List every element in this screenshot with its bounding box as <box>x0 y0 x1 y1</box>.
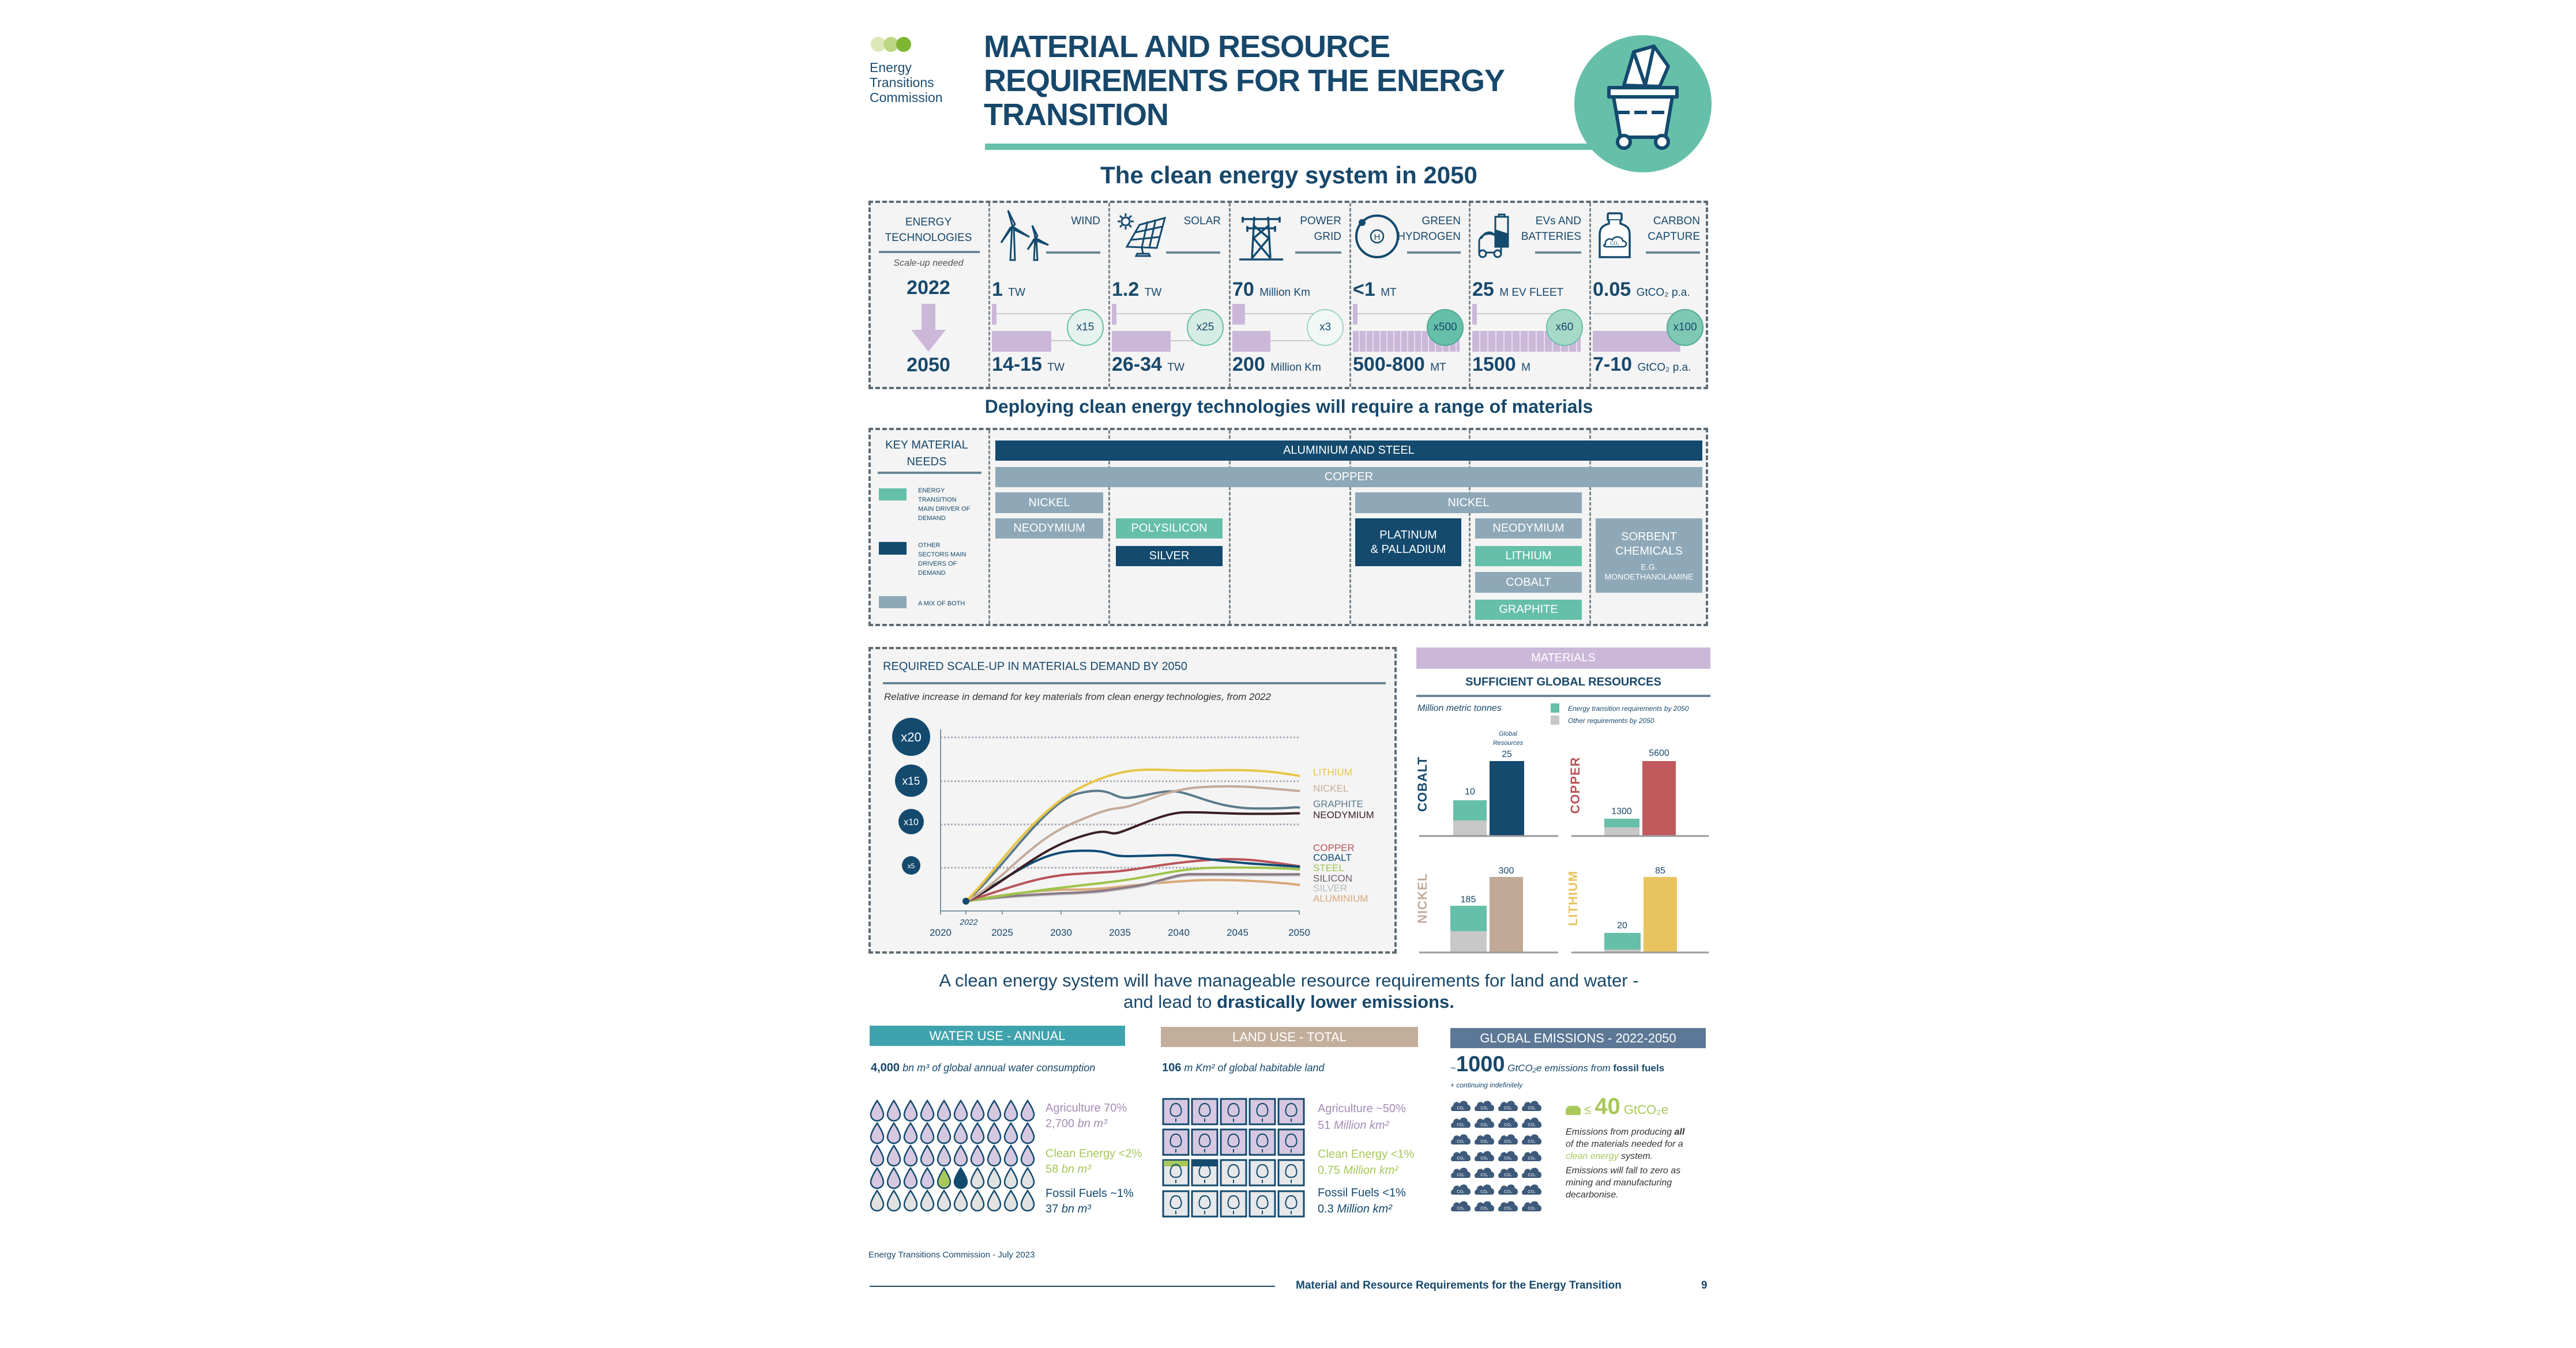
panel: global emissions <box>1450 1028 1706 1211</box>
legend: key material needs: DRIVERS OF <box>918 560 957 567</box>
material bars: COPPER <box>1325 470 1373 483</box>
panel: water use <box>870 1026 1142 1215</box>
panel: water use: 37 bn m³ <box>1046 1203 1091 1215</box>
line chart: COBALT <box>1313 852 1352 863</box>
icon: mine cart <box>1574 35 1712 172</box>
column: green hydrogen: HYDROGEN <box>1397 231 1461 243</box>
column: carbon capture: CO₂ <box>1610 240 1619 246</box>
column: carbon capture: CARBON <box>1653 215 1700 227</box>
bar chart: cobalt: 10 <box>1465 787 1475 797</box>
panel: global emissions: Emissions from producing all <box>1566 1127 1684 1137</box>
panel: energy technologies <box>868 201 1708 389</box>
column: EVs and batteries: 1500 M <box>1472 353 1530 375</box>
material bars: NICKEL <box>1447 496 1490 509</box>
bar chart: copper: 5600 <box>1649 748 1669 758</box>
panel: global emissions: ≤ 40 GtCO₂e <box>1584 1094 1668 1119</box>
column: wind: WIND <box>1071 215 1100 227</box>
line chart: 2030 <box>1050 927 1072 938</box>
title <box>984 29 1505 132</box>
panel: water use: 58 bn m³ <box>1046 1163 1091 1176</box>
material bars: & PALLADIUM <box>1371 543 1446 556</box>
panel: water use: Clean Energy <2% <box>1046 1147 1142 1160</box>
column: power grid: 70 Million Km <box>1232 278 1310 300</box>
legend: key material needs: MAIN DRIVER OF <box>918 506 970 513</box>
column: solar: SOLAR <box>1184 215 1221 227</box>
panel: sufficient global resources: Resources <box>1493 740 1523 747</box>
legend: key material needs: TRANSITION <box>918 496 957 503</box>
line chart: 2050 <box>1288 927 1310 938</box>
line chart: NICKEL <box>1313 783 1348 794</box>
column: energy technologies header: 2022 <box>907 277 950 299</box>
legend: key material needs <box>878 439 981 608</box>
line chart: STEEL <box>1313 863 1344 873</box>
line chart: LITHIUM <box>1313 767 1352 778</box>
material bars: SORBENT <box>1621 530 1677 543</box>
material bars: CHEMICALS <box>1615 544 1683 557</box>
column: power grid: 200 Million Km <box>1232 353 1321 375</box>
column: carbon capture: CAPTURE <box>1648 231 1700 243</box>
column: energy technologies header: ENERGY <box>905 216 952 228</box>
material bars: E.G. <box>1641 562 1657 571</box>
material bars: GRAPHITE <box>1499 603 1558 616</box>
panel: water use: Fossil Fuels ~1% <box>1046 1187 1134 1200</box>
column: wind: 14-15 TW <box>992 353 1065 375</box>
bar chart: cobalt: 25 <box>1502 750 1512 759</box>
text: 9 <box>1701 1279 1708 1291</box>
material bars: NEODYMIUM <box>1492 522 1565 534</box>
panel: land use: 0.75 Million km² <box>1318 1164 1398 1177</box>
legend: key material needs: A MIX OF BOTH <box>918 600 965 607</box>
column: wind: x15 <box>1077 321 1094 333</box>
panel: global emissions: ~1000 GtCO₂e emissions from fossil fuels <box>1450 1052 1664 1076</box>
material bars: NEODYMIUM <box>1013 522 1085 534</box>
panel: water use: 2,700 bn m³ <box>1046 1117 1107 1130</box>
column: green hydrogen: x500 <box>1433 321 1457 333</box>
panel: materials scale-up chart <box>868 647 1397 954</box>
column: wind <box>992 210 1104 375</box>
heading: manageable resource requirements: A clean energy system will have manageable resource requirements for land and water - <box>939 970 1639 991</box>
panel: global emissions: decarbonise. <box>1566 1190 1619 1200</box>
column: carbon capture: 0.05 GtCO₂ p.a. <box>1593 278 1690 300</box>
column: green hydrogen: 500-800 MT <box>1353 353 1446 375</box>
column: EVs and batteries <box>1472 213 1583 375</box>
bar chart: nickel <box>1416 866 1558 954</box>
logo: Transitions <box>870 75 934 90</box>
legend: key material needs: NEEDS <box>907 455 946 468</box>
heading: manageable resource requirements: and lead to drastically lower emissions. <box>1123 992 1454 1012</box>
line chart: 2035 <box>1109 927 1131 938</box>
legend: key material needs: DEMAND <box>918 570 946 577</box>
line chart: SILVER <box>1313 883 1347 894</box>
column: EVs and batteries: BATTERIES <box>1521 231 1581 243</box>
column: green hydrogen <box>1353 214 1464 375</box>
column: green hydrogen: H <box>1374 232 1380 242</box>
panel: land use: Agriculture ~50% <box>1318 1102 1406 1115</box>
column: carbon capture <box>1593 212 1703 375</box>
panel: key material needs <box>868 428 1708 626</box>
material bars: PLATINUM <box>1379 528 1437 541</box>
column: power grid: x3 <box>1319 321 1331 333</box>
column: carbon capture: x100 <box>1673 321 1697 333</box>
line chart: x10 <box>904 818 919 827</box>
heading: clean energy system: The clean energy system in 2050 <box>1100 161 1477 189</box>
column: power grid <box>1232 215 1344 375</box>
panel: sufficient global resources: Other requirements by 2050 <box>1568 717 1654 725</box>
title: REQUIREMENTS FOR THE ENERGY <box>984 63 1505 98</box>
logo: Commission <box>870 90 943 105</box>
legend: key material needs: ENERGY <box>918 487 945 494</box>
panel: sufficient global resources: MATERIALS <box>1531 652 1596 664</box>
line chart: SILICON <box>1313 873 1352 884</box>
panel: global emissions: GLOBAL EMISSIONS - 2022-2050 <box>1480 1031 1676 1045</box>
line chart: x20 <box>901 730 922 744</box>
bar chart: nickel: 185 <box>1461 895 1476 905</box>
panel: global emissions: + continuing indefinitely <box>1450 1081 1522 1089</box>
material bars: POLYSILICON <box>1131 522 1207 534</box>
bar chart: copper: 1300 <box>1611 807 1632 816</box>
panel: sufficient global resources <box>1416 647 1710 747</box>
bar chart: cobalt <box>1416 750 1558 837</box>
panel: water use: 4,000 bn m³ of global annual water consumption <box>871 1061 1095 1074</box>
heading: deploying: Deploying clean energy technologies will require a range of materials <box>985 396 1593 417</box>
panel: land use: LAND USE - TOTAL <box>1232 1030 1347 1044</box>
legend: key material needs: KEY MATERIAL <box>885 439 968 451</box>
material bars: LITHIUM <box>1505 549 1551 562</box>
bar chart: nickel: 300 <box>1499 866 1514 876</box>
legend: key material needs: OTHER <box>918 542 940 549</box>
column: solar: 26-34 TW <box>1112 353 1184 375</box>
panel: land use: Clean Energy <1% <box>1318 1148 1414 1161</box>
line chart: 2040 <box>1168 927 1190 938</box>
panel: land use: Fossil Fuels <1% <box>1318 1187 1406 1199</box>
material bars: ALUMINIUM AND STEEL <box>1283 444 1415 457</box>
material bars: MONOETHANOLAMINE <box>1604 572 1693 581</box>
panel: sufficient global resources: SUFFICIENT GLOBAL RESOURCES <box>1465 676 1661 688</box>
line chart: x5 <box>908 862 915 870</box>
text: Relative increase in demand for key materials from clean energy technologies, from 2022 <box>884 691 1271 702</box>
line chart: COPPER <box>1313 842 1355 853</box>
material bars: SILVER <box>1149 549 1189 562</box>
legend: key material needs: DEMAND <box>918 515 946 522</box>
footer: Energy Transitions Commission - July 2023 <box>868 1250 1035 1260</box>
title: MATERIAL AND RESOURCE <box>984 29 1390 64</box>
column: energy technologies header: 2050 <box>907 354 950 376</box>
column: carbon capture: 7-10 GtCO₂ p.a. <box>1593 353 1691 375</box>
column: EVs and batteries: 25 M EV FLEET <box>1472 278 1563 300</box>
bar chart: copper <box>1569 748 1709 837</box>
panel: land use: 0.3 Million km² <box>1318 1203 1392 1215</box>
panel: water use: WATER USE - ANNUAL <box>930 1029 1065 1043</box>
panel: global emissions: of the materials needed for a <box>1566 1139 1683 1149</box>
line chart: GRAPHITE <box>1313 799 1363 809</box>
title: TRANSITION <box>984 97 1168 132</box>
logo <box>870 37 943 105</box>
panel: global emissions: Emissions will fall to zero as <box>1566 1166 1680 1176</box>
column: energy technologies header: Scale-up needed <box>894 258 963 268</box>
bar chart: lithium <box>1569 866 1709 954</box>
column: green hydrogen: GREEN <box>1421 215 1461 227</box>
column: wind: 1 TW <box>992 278 1025 300</box>
line chart: x15 <box>902 775 920 788</box>
column: energy technologies header: TECHNOLOGIES <box>885 232 972 244</box>
text: REQUIRED SCALE-UP IN MATERIALS DEMAND BY 2050 <box>883 660 1187 673</box>
panel: water use: Agriculture 70% <box>1046 1102 1127 1114</box>
material bars: COBALT <box>1506 575 1551 588</box>
column: green hydrogen: <1 MT <box>1353 278 1397 300</box>
panel: sufficient global resources: Energy transition requirements by 2050 <box>1568 705 1688 713</box>
panel: land use <box>1161 1027 1418 1218</box>
line chart: 2020 <box>930 927 952 938</box>
column: power grid: GRID <box>1314 231 1341 243</box>
material bars <box>995 440 1702 620</box>
bar chart: lithium: 20 <box>1617 921 1627 931</box>
line chart: NEODYMIUM <box>1313 809 1374 820</box>
line chart: 2022 <box>959 917 978 927</box>
column: EVs and batteries: EVs AND <box>1536 215 1581 227</box>
panel: land use: 106 m Km² of global habitable land <box>1162 1061 1325 1074</box>
column: solar: 1.2 TW <box>1112 278 1161 300</box>
legend: key material needs: SECTORS MAIN <box>918 551 967 558</box>
bar chart: lithium: 85 <box>1655 866 1665 876</box>
column: power grid: POWER <box>1300 215 1341 227</box>
panel: land use: 51 Million km² <box>1318 1119 1389 1132</box>
line chart: ALUMINIUM <box>1313 893 1368 904</box>
panel: sufficient global resources: Global <box>1499 731 1517 737</box>
column: EVs and batteries: x60 <box>1556 321 1573 333</box>
panel: global emissions: clean energy system. <box>1566 1151 1653 1161</box>
line chart: 2045 <box>1227 927 1248 938</box>
panel: sufficient global resources: Million metric tonnes <box>1417 703 1502 713</box>
material bars: NICKEL <box>1028 496 1070 509</box>
text: Material and Resource Requirements for the Energy Transition <box>1296 1279 1622 1291</box>
column: solar <box>1112 213 1224 375</box>
logo: Energy <box>870 60 912 75</box>
column: energy technologies header <box>879 216 980 376</box>
column: solar: x25 <box>1197 321 1214 333</box>
line chart: 2025 <box>991 927 1013 938</box>
panel: global emissions: mining and manufacturing <box>1566 1178 1672 1188</box>
heading: manageable resource requirements <box>939 970 1639 1012</box>
